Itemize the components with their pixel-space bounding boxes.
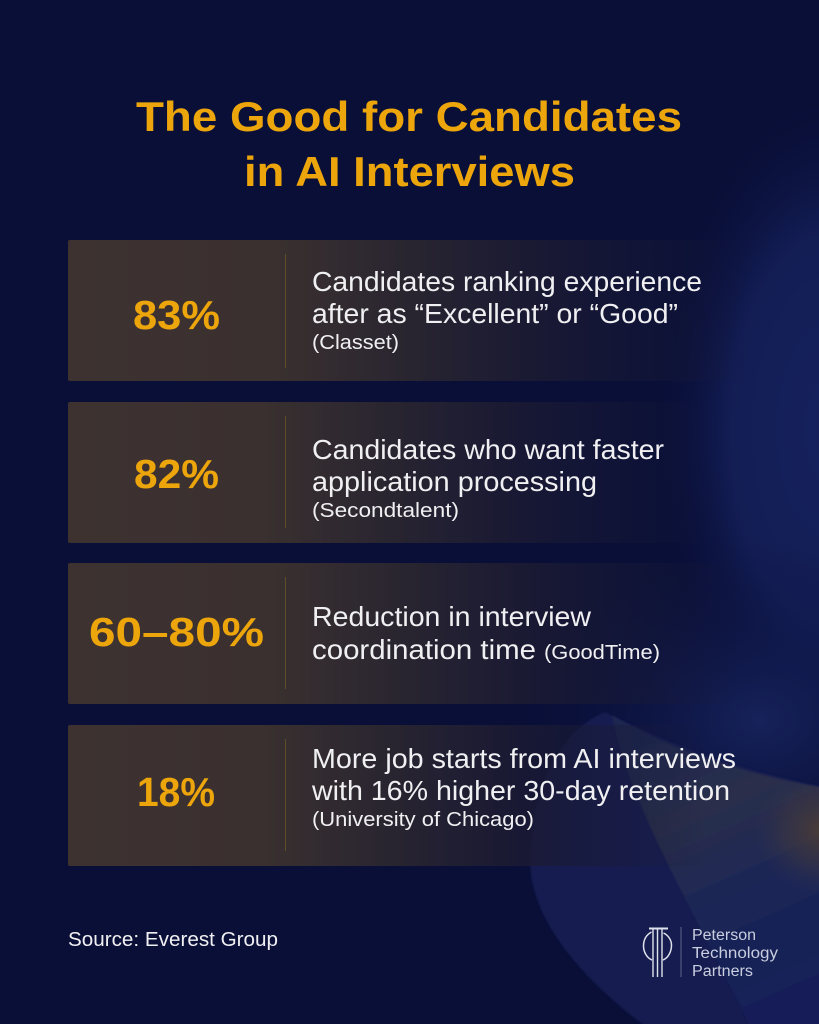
description: application processing [312, 466, 597, 497]
background [530, 162, 819, 1024]
description: More job starts from AI interviews [312, 743, 736, 774]
description: Reduction in interview [312, 601, 591, 632]
stat value: 83% [133, 292, 220, 338]
panel: stat 82% [68, 402, 708, 543]
title: The Good for Candidates [136, 93, 682, 140]
stat value: 60–80% [89, 609, 264, 655]
wordmark [692, 927, 778, 980]
panel: stat 60–80% [68, 563, 738, 704]
title [136, 93, 682, 195]
panel: stat 83% [68, 240, 748, 381]
icon: logo mark [644, 928, 672, 977]
wordmark: Technology [692, 945, 778, 962]
stat value: 18% [137, 769, 215, 815]
description: coordination time [312, 634, 536, 665]
description: with 16% higher 30-day retention [311, 775, 730, 806]
description: after as “Excellent” or “Good” [312, 298, 678, 329]
logo: Peterson Technology Partners [644, 927, 778, 980]
description: Candidates who want faster [312, 434, 664, 465]
wordmark: Partners [692, 963, 753, 980]
description: (University of Chicago) [312, 809, 534, 831]
title: in AI Interviews [244, 148, 575, 195]
description [312, 434, 664, 522]
description [311, 743, 736, 831]
description: (Classet) [312, 332, 399, 354]
description [312, 266, 702, 354]
source note: Source: Everest Group [68, 929, 278, 951]
panel: stat 18% [68, 725, 736, 866]
description: Candidates ranking experience [312, 266, 702, 297]
description [312, 601, 660, 665]
description: (Secondtalent) [312, 500, 459, 522]
stat value: 82% [134, 451, 219, 497]
description: (GoodTime) [544, 642, 660, 664]
wordmark: Peterson [692, 927, 756, 944]
